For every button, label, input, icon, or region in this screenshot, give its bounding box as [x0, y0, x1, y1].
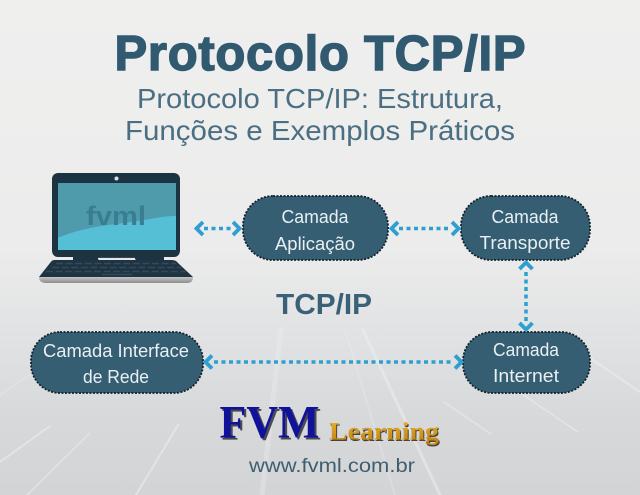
laptop screen text: fvml: [86, 201, 146, 231]
arrow: application to transport: [392, 222, 458, 235]
website url: www.fvml.com.br: [248, 455, 416, 477]
node: Camada Aplicação: [243, 196, 388, 260]
logo: FVM Learning: [220, 396, 441, 450]
node: Camada Transporte: Transporte: [480, 233, 570, 253]
node: Camada Internet: Camada: [493, 340, 560, 360]
logo: FVM Learning: Learning: [329, 418, 440, 446]
laptop screen: [58, 183, 176, 250]
subtitle: Protocolo TCP/IP: Estrutura,: [137, 83, 503, 114]
node: Camada Transporte: Camada: [492, 207, 559, 227]
node: Camada Aplicação: Aplicação: [275, 234, 355, 254]
arrow: transport to internet: [520, 262, 532, 330]
logo: FVM Learning: FVM: [222, 398, 322, 450]
subtitle: [125, 83, 515, 146]
laptop screen bezel: [52, 173, 180, 257]
title: Protocolo TCP/IP: [114, 27, 526, 81]
node: Camada Interface de Rede: [31, 332, 203, 393]
node: Camada Interface de Rede: de Rede: [83, 367, 149, 387]
node: Camada Internet: [463, 332, 590, 393]
laptop silver base strip: [39, 277, 193, 283]
node: Camada Aplicação: Camada: [282, 207, 349, 227]
logo: FVM Learning: Learning: [330, 420, 441, 447]
node: Camada Transporte: [461, 196, 590, 260]
arrow: laptop to application: [196, 222, 240, 235]
arrow: interface to internet: [206, 356, 462, 368]
laptop keyboard deck: [39, 260, 193, 277]
subtitle: Funções e Exemplos Práticos: [125, 115, 515, 146]
node: Camada Interface de Rede: Camada Interface: [43, 341, 189, 361]
center label: TCP/IP: TCP/IP: [276, 289, 372, 321]
icon: laptop: [39, 173, 193, 283]
node: Camada Internet: Internet: [493, 366, 559, 386]
logo: FVM Learning: FVM: [220, 396, 320, 448]
